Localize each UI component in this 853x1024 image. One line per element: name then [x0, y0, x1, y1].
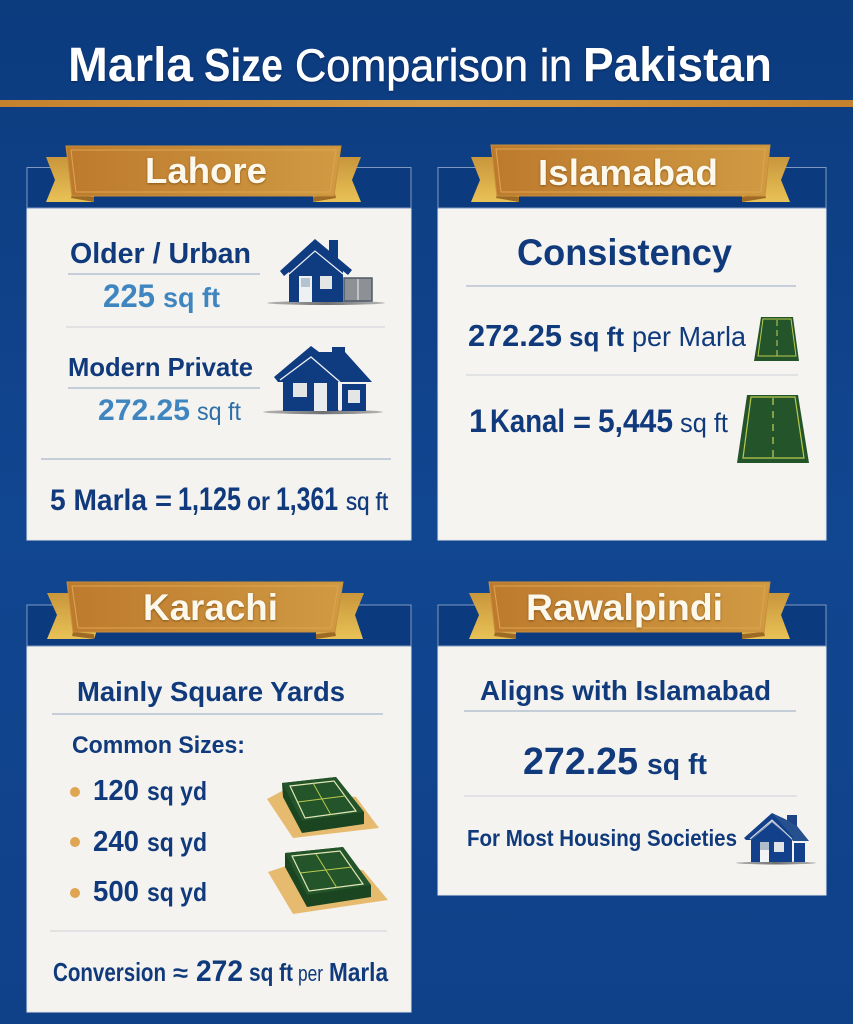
5 Marla conversion — [50, 481, 388, 517]
title: Comparison — [295, 40, 528, 91]
title: Pakistan — [583, 39, 772, 92]
Karachi header band — [27, 605, 411, 646]
size list: 240 — [93, 826, 139, 858]
272.25 sq ft value — [523, 741, 707, 783]
Karachi ribbon: Karachi — [143, 587, 278, 628]
1 Kanal equals 5,445: sq ft — [680, 408, 728, 438]
Rawalpindi card body — [438, 646, 826, 895]
icon: raised plot one — [267, 777, 379, 838]
Islamabad header band — [438, 168, 826, 208]
Older / Urban label: Older / Urban — [70, 238, 251, 270]
size list: 500 — [93, 876, 139, 908]
5 Marla conversion: 1,361 — [276, 481, 338, 517]
panel: Lahore — [27, 146, 411, 540]
title — [68, 39, 772, 92]
272.25 sq ft value: sq ft — [647, 749, 707, 781]
5 Marla conversion: 1,125 — [178, 481, 241, 517]
Lahore ribbon: Lahore — [145, 150, 267, 191]
Consistency heading: Consistency — [517, 232, 732, 273]
icon: raised plot two — [268, 847, 388, 914]
Rawalpindi ribbon — [469, 582, 790, 639]
225 sq ft value — [103, 278, 220, 314]
5 Marla conversion: or — [247, 486, 270, 516]
Conversion note: Conversion — [53, 957, 166, 987]
5 Marla conversion: sq ft — [346, 488, 388, 516]
Conversion note: 272 — [196, 955, 243, 988]
1 Kanal equals 5,445: 1 — [469, 403, 487, 439]
225 sq ft value: 225 — [103, 278, 155, 314]
272.25 per Marla: per Marla — [632, 321, 746, 352]
size list: sq yd — [147, 776, 207, 806]
gold header rule — [0, 100, 853, 107]
panel: Karachi — [27, 582, 411, 1012]
272.25 sq ft value: 272.25 — [98, 394, 190, 427]
Karachi ribbon — [47, 582, 364, 639]
Common Sizes label: Common Sizes: — [72, 732, 245, 759]
housing societies note: For Most Housing Societies — [467, 825, 737, 851]
272.25 per Marla — [468, 318, 746, 353]
Islamabad card body — [438, 208, 826, 540]
1 Kanal equals 5,445: Kanal — [490, 403, 565, 439]
Rawalpindi header band — [438, 605, 826, 646]
Conversion note: sq ft — [249, 959, 294, 987]
size list: sq yd — [147, 877, 207, 907]
panel: Islamabad — [438, 145, 826, 540]
272.25 per Marla: sq ft — [569, 322, 624, 352]
1 Kanal equals 5,445 — [469, 403, 728, 439]
size list: sq yd — [147, 827, 207, 857]
272.25 sq ft value: 272.25 — [523, 741, 638, 783]
5 Marla conversion: = — [155, 485, 172, 516]
1 Kanal equals 5,445: = — [573, 406, 591, 439]
272.25 sq ft value: sq ft — [197, 398, 241, 426]
size list: 120 — [93, 775, 139, 807]
title: Marla — [68, 39, 193, 92]
Conversion note — [53, 955, 388, 988]
Lahore card body — [27, 208, 411, 540]
title: in — [540, 40, 572, 91]
Lahore ribbon — [46, 146, 361, 202]
icon: small plot — [754, 317, 799, 361]
Rawalpindi ribbon: Rawalpindi — [526, 587, 723, 628]
icon: modern house — [263, 346, 383, 414]
272.25 sq ft value — [98, 394, 241, 427]
Aligns with Islamabad heading: Aligns with Islamabad — [480, 675, 771, 706]
icon: large plot — [737, 395, 809, 463]
title: Size — [204, 39, 283, 91]
Islamabad ribbon: Islamabad — [538, 152, 718, 193]
panel: Rawalpindi — [438, 582, 826, 895]
225 sq ft value: sq ft — [163, 282, 220, 313]
icon: society house — [736, 813, 816, 864]
Conversion note: ≈ — [173, 960, 188, 987]
Modern Private label: Modern Private — [68, 352, 253, 382]
Conversion note: per — [298, 961, 323, 986]
Lahore header band — [27, 168, 411, 208]
1 Kanal equals 5,445: 5,445 — [598, 403, 673, 439]
5 Marla conversion: 5 Marla — [50, 484, 147, 517]
size list — [70, 775, 207, 908]
icon: older house — [267, 239, 385, 305]
Karachi card body — [27, 646, 411, 1012]
Mainly Square Yards heading: Mainly Square Yards — [77, 676, 345, 707]
Conversion note: Marla — [329, 957, 388, 987]
Islamabad ribbon — [471, 145, 790, 202]
272.25 per Marla: 272.25 — [468, 318, 562, 353]
